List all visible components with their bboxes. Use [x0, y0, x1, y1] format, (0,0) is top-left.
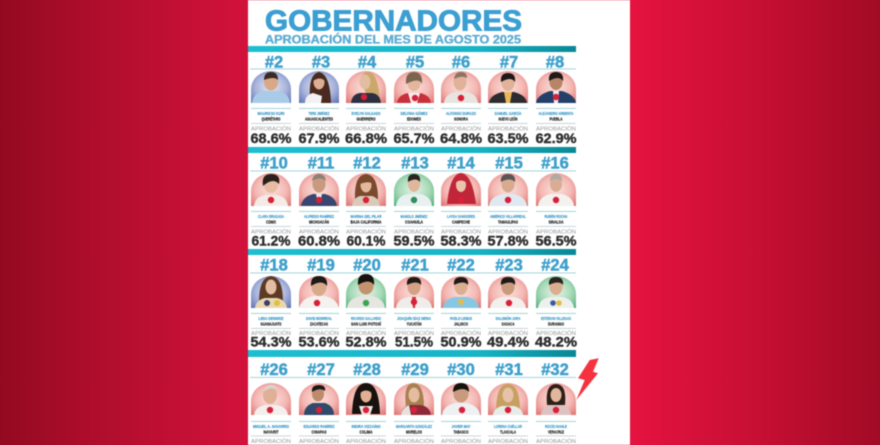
rank: #24 [541, 256, 570, 274]
portrait [346, 71, 386, 103]
card: #27 Eduardo Ramírez [299, 361, 339, 445]
rank: #21 [401, 256, 429, 274]
portrait [536, 173, 576, 206]
card: #6 Alfonso Durazo [440, 54, 482, 146]
approval label: APROBACIÓN [346, 126, 386, 132]
portrait [488, 173, 528, 206]
approval label: APROBACIÓN [441, 126, 481, 132]
rank: #31 [495, 361, 523, 379]
approval label: APROBACIÓN [299, 126, 339, 132]
approval label: APROBACIÓN [536, 228, 576, 236]
state: TABASCO [454, 430, 469, 434]
name: ESTEBAN VILLEGAS [541, 316, 571, 321]
state: EDOMEX [407, 116, 421, 122]
portrait [299, 383, 339, 415]
approval value: 63.5% [488, 131, 528, 146]
card: #5 Delfina Gómez [394, 54, 434, 146]
card: #31 Lorena Cuéllar [488, 361, 528, 445]
rank: #20 [353, 256, 381, 274]
approval label: APROBACIÓN [299, 330, 339, 337]
state: ZACATECAS [310, 322, 328, 326]
approval value: 62.9% [536, 131, 576, 146]
card: #15 Américo Villarreal [488, 154, 528, 248]
card: #13 Manolo Jiménez [394, 154, 434, 248]
approval label: APROBACIÓN [299, 438, 339, 445]
card: #22 Pablo Lemus [440, 256, 482, 350]
approval label: APROBACIÓN [251, 438, 291, 445]
approval label: APROBACIÓN [299, 228, 339, 236]
state: NUEVO LEÓN [498, 116, 518, 122]
rank: #28 [353, 361, 381, 379]
approval label: APROBACIÓN [441, 228, 481, 236]
portrait [299, 276, 339, 308]
approval value: 54.3% [250, 335, 292, 350]
portrait [536, 383, 576, 415]
approval value: 67.9% [298, 131, 340, 146]
name: MARINA DEL PILAR [350, 214, 382, 219]
name: JAVIER MAY [452, 424, 471, 429]
state: JALISCO [454, 322, 468, 326]
approval value: 60.8% [298, 234, 340, 248]
card: #24 Esteban Villegas [535, 256, 577, 350]
card: #14 Layda Sansores [440, 154, 482, 248]
name: RUBÉN ROCHA [544, 214, 568, 219]
name: ROCÍO NAHLE [545, 424, 567, 429]
name: RICARDO GALLARDO [351, 316, 381, 321]
portrait [536, 276, 576, 308]
portrait [346, 173, 386, 206]
card: #18 Libia Dennise [250, 256, 292, 350]
state: BAJA CALIFORNIA [351, 220, 382, 224]
card: #11 Alfredo Ramírez [298, 154, 340, 248]
approval label: APROBACIÓN [488, 126, 528, 132]
approval label: APROBACIÓN [488, 330, 528, 337]
portrait [488, 71, 528, 103]
approval label: APROBACIÓN [251, 330, 291, 337]
name: MARGARITA GONZÁLEZ [396, 424, 432, 429]
approval label: APROBACIÓN [251, 228, 291, 236]
state: GUANAJUATO [260, 322, 282, 326]
state: AGUASCALIENTES [305, 116, 333, 122]
state: PUEBLA [550, 116, 563, 122]
rank: #12 [353, 154, 381, 172]
portrait [394, 173, 434, 206]
card: #16 Rubén Rocha [536, 154, 576, 248]
name: MANOLO JIMÉNEZ [400, 214, 428, 219]
card: #7 Samuel García [488, 54, 528, 146]
rank: #11 [308, 154, 334, 172]
rank: #6 [452, 54, 470, 72]
white infographic panel [248, 0, 630, 445]
name: EDUARDO RAMÍREZ [303, 424, 335, 429]
portrait [346, 383, 386, 415]
name: MIGUEL A. NAVARRO [253, 424, 289, 429]
approval value: 68.6% [250, 131, 292, 146]
approval value: 65.7% [394, 131, 434, 146]
approval value: 48.2% [535, 335, 577, 350]
state: SONORA [454, 116, 469, 122]
state: TLAXCALA [500, 430, 517, 434]
state: YUCATÁN [406, 322, 422, 326]
rank: #27 [307, 361, 335, 379]
portrait [441, 71, 481, 103]
approval value: 60.1% [346, 234, 386, 248]
name: EVELYN SALGADO [352, 111, 381, 116]
band 2 [248, 147, 576, 153]
name: AMÉRICO VILLARREAL [490, 214, 526, 219]
state: TAMAULIPAS [498, 220, 518, 224]
approval label: APROBACIÓN [441, 330, 481, 337]
approval value: 57.8% [488, 234, 528, 248]
approval value: 53.6% [298, 335, 340, 350]
portrait [488, 276, 528, 308]
rank: #3 [312, 54, 330, 72]
name: TERE JIMÉNEZ [308, 111, 330, 116]
band 3 [248, 249, 576, 255]
portrait [346, 274, 386, 308]
name: DELFINA GÓMEZ [400, 111, 428, 116]
card: #3 Tere Jiménez [298, 54, 340, 146]
approval label: APROBACIÓN [394, 330, 434, 337]
portrait [488, 383, 528, 415]
rank: #4 [358, 54, 377, 72]
state: NAYARIT [264, 430, 279, 434]
state: COAHUILA [405, 220, 424, 224]
rank: #30 [447, 361, 475, 379]
portrait [441, 173, 481, 206]
card: #26 Miguel A. Navarro [251, 361, 291, 445]
approval label: APROBACIÓN [394, 228, 434, 236]
state: OAXACA [502, 322, 515, 326]
name: LORENA CUÉLLAR [494, 424, 523, 429]
approval label: APROBACIÓN [346, 330, 386, 337]
name: SALOMÓN JARA [496, 316, 521, 321]
approval label: APROBACIÓN [346, 438, 386, 445]
card: #20 Ricardo Gallardo [346, 256, 386, 350]
approval value: 52.8% [346, 335, 386, 350]
band 4 [248, 350, 576, 357]
rank: #32 [541, 361, 569, 379]
state: GUERRERO [356, 116, 376, 122]
card: #10 Clara Brugada [251, 154, 291, 248]
rank: #18 [260, 256, 288, 274]
rank: #14 [447, 154, 476, 172]
rank: #15 [495, 154, 523, 172]
name: MAURICIO KURI [258, 111, 284, 116]
state: QUERÉTARO [262, 116, 281, 122]
portrait [394, 71, 434, 103]
title: GOBERNADORES [265, 6, 522, 38]
card: #21 Joaquín Díaz Mena [394, 256, 434, 350]
rank: #10 [260, 154, 288, 172]
rank: #23 [495, 256, 523, 274]
card: #29 Margarita González [394, 361, 434, 445]
portrait [441, 276, 481, 308]
portrait [394, 276, 434, 308]
approval label: APROBACIÓN [394, 126, 434, 132]
state: CDMX [266, 220, 276, 224]
card: #12 Marina del Pilar [346, 154, 386, 248]
approval value: 64.8% [440, 131, 482, 146]
portrait [251, 173, 291, 206]
card: #32 Rocío Nahle [536, 361, 576, 445]
approval label: APROBACIÓN [251, 126, 291, 132]
portrait [299, 71, 339, 103]
rank: #13 [401, 154, 429, 172]
name: LAYDA SANSORES [447, 214, 475, 219]
rank: #26 [260, 361, 288, 379]
state: SINALOA [549, 220, 564, 224]
approval label: APROBACIÓN [441, 438, 481, 445]
approval label: APROBACIÓN [536, 330, 576, 337]
approval label: APROBACIÓN [488, 438, 528, 445]
rank: #22 [447, 256, 475, 274]
approval label: APROBACIÓN [536, 438, 576, 445]
name: CLARA BRUGADA [258, 214, 285, 219]
name: ALFREDO RAMÍREZ [304, 214, 334, 219]
portrait [299, 173, 339, 206]
approval label: APROBACIÓN [488, 228, 528, 236]
portrait [394, 383, 434, 415]
name: INDIRA VIZCAÍNO [352, 424, 381, 429]
state: CAMPECHE [452, 220, 470, 224]
name: LIBIA DENNISE [258, 316, 284, 321]
rank: #7 [500, 54, 518, 72]
approval value: 50.9% [440, 335, 482, 350]
portrait [536, 71, 576, 103]
portrait [251, 383, 291, 415]
card: #23 Salomón Jara [487, 256, 529, 350]
approval value: 56.5% [536, 234, 576, 248]
approval value: 59.5% [394, 234, 434, 248]
state: MICHOACÁN [309, 220, 329, 224]
rank: #29 [401, 361, 429, 379]
state: SAN LUIS POTOSÍ [351, 322, 382, 326]
name: ALEJANDRO ARMENTA [538, 111, 574, 116]
portrait [251, 276, 291, 308]
state: COLIMA [360, 430, 373, 434]
card: #28 Indira Vizcaíno [346, 361, 386, 445]
approval value: 58.3% [440, 234, 482, 248]
name: SAMUEL GARCÍA [494, 111, 522, 116]
rank: #2 [265, 54, 283, 72]
state: DURANGO [548, 322, 564, 326]
portrait [251, 71, 291, 103]
card: #8 Alejandro Armenta [536, 54, 576, 146]
rank: #8 [546, 54, 564, 72]
state: CHIAPAS [312, 430, 327, 434]
card: #19 David Monreal [298, 256, 340, 350]
name: DAVID MONREAL [306, 316, 332, 321]
rank: #19 [307, 256, 335, 274]
state: MORELOS [406, 430, 422, 434]
name: ALFONSO DURAZO [446, 111, 476, 116]
name: JOAQUÍN DÍAZ MENA [397, 316, 432, 321]
name: PABLO LEMUS [450, 316, 472, 321]
subtitle: APROBACIÓN DEL MES DE AGOSTO 2025 [265, 33, 522, 46]
card: #2 Mauricio Kuri [250, 54, 292, 146]
approval value: 51.5% [395, 335, 433, 350]
approval value: 66.8% [345, 131, 387, 146]
approval value: 61.2% [252, 234, 290, 248]
rank: #16 [541, 154, 569, 172]
portrait [441, 383, 481, 415]
approval label: APROBACIÓN [346, 228, 386, 236]
card: #30 Javier May [441, 361, 481, 445]
card: #4 Evelyn Salgado [345, 54, 387, 146]
band 1 [248, 46, 576, 52]
approval value: 49.4% [487, 335, 529, 350]
approval label: APROBACIÓN [394, 438, 434, 445]
rank: #5 [406, 54, 424, 72]
icon: red lightning bolt [576, 358, 599, 400]
state: VERACRUZ [548, 430, 564, 434]
approval label: APROBACIÓN [536, 126, 576, 132]
